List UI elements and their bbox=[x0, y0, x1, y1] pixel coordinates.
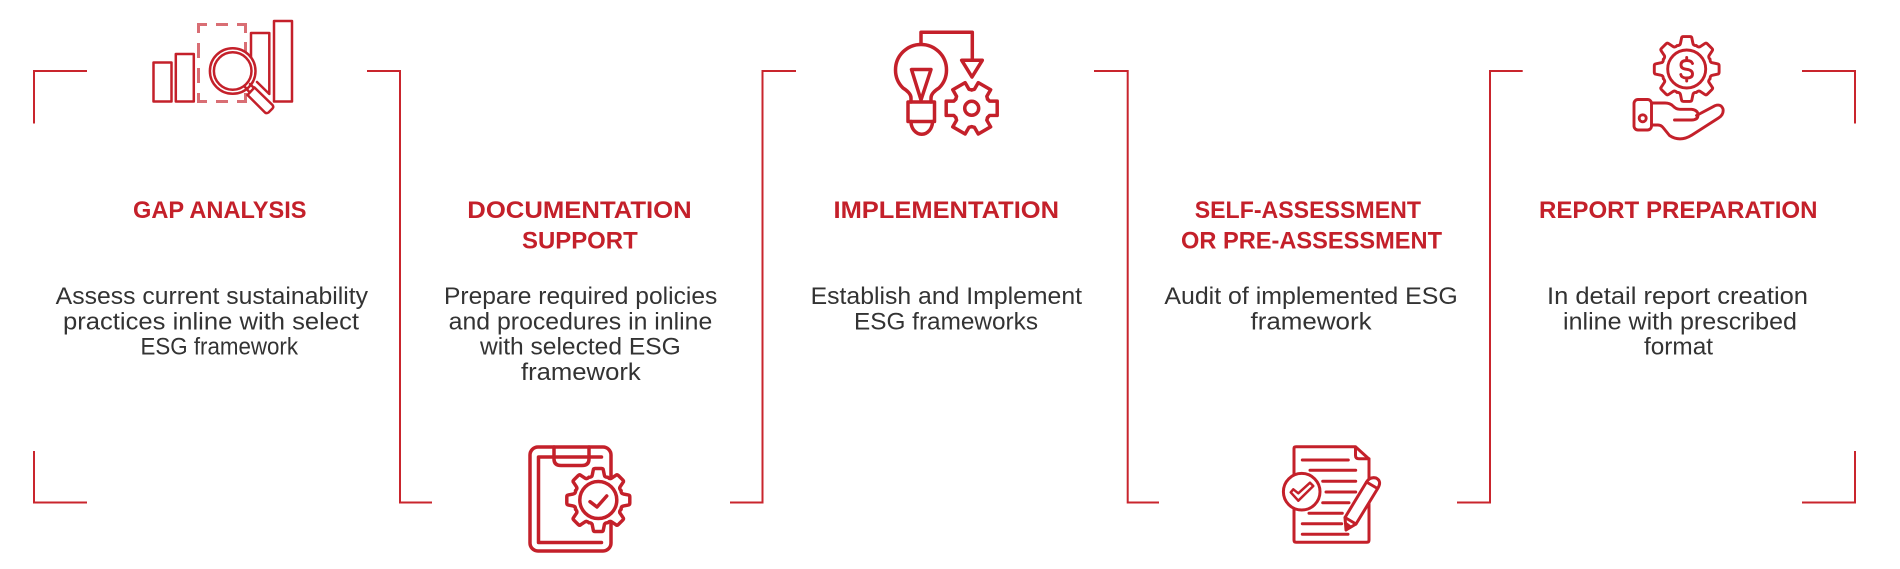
heading: implementation: IMPLEMENTATION bbox=[834, 197, 1059, 224]
bracket: panel 1 frame bbox=[34, 71, 432, 502]
heading: documentation support bbox=[467, 197, 692, 254]
panel: self-assessment or pre-assessment bbox=[1164, 71, 1523, 542]
text: report preparation description bbox=[1547, 283, 1808, 361]
icon: light bulb, arrow and gear bbox=[895, 32, 1008, 144]
text: implementation description: Establish and Implement bbox=[811, 283, 1082, 310]
panel: implementation bbox=[811, 32, 1159, 503]
icon: clipboard with gear and check bbox=[530, 447, 630, 551]
heading: documentation support: DOCUMENTATION bbox=[467, 197, 692, 224]
panel: documentation support bbox=[444, 71, 796, 551]
text: implementation description: ESG frameworks bbox=[854, 308, 1038, 335]
text: gap analysis description: practices inline with select bbox=[63, 308, 359, 335]
text: documentation support description: Prepare required policies bbox=[444, 283, 717, 310]
bracket: panel 2 frame bbox=[730, 71, 796, 502]
text: documentation support description bbox=[444, 283, 717, 386]
text: gap analysis description bbox=[56, 283, 369, 361]
heading: gap analysis: GAP ANALYSIS bbox=[133, 197, 306, 224]
icon: document with check and pencil bbox=[1283, 447, 1380, 542]
text: gap analysis description: Assess current sustainability bbox=[56, 283, 369, 310]
bracket: panel 5 frame bbox=[1802, 71, 1855, 502]
text: self-assessment description bbox=[1164, 283, 1458, 335]
panel: gap analysis bbox=[34, 21, 432, 502]
heading: self-assessment or pre-assessment: SELF-ASSESSMENT bbox=[1195, 197, 1421, 224]
heading: report preparation: REPORT PREPARATION bbox=[1539, 197, 1818, 224]
bracket: panel 3 frame bbox=[1094, 71, 1159, 502]
heading: self-assessment or pre-assessment bbox=[1181, 197, 1442, 254]
text: gap analysis description: ESG framework bbox=[140, 334, 299, 361]
text: documentation support description: with selected ESG bbox=[479, 334, 681, 361]
text: self-assessment description: Audit of implemented ESG bbox=[1164, 283, 1458, 310]
text: documentation support description: and procedures in inline bbox=[449, 308, 712, 335]
icon: bar chart with magnifier bbox=[154, 21, 292, 113]
bracket: panel 4 frame bbox=[1457, 71, 1523, 502]
heading: self-assessment or pre-assessment: OR PRE-ASSESSMENT bbox=[1181, 228, 1442, 254]
text: report preparation description: format bbox=[1644, 334, 1713, 361]
text: report preparation description: inline with prescribed bbox=[1563, 308, 1797, 335]
text: documentation support description: framework bbox=[521, 359, 641, 386]
icon: hand holding gear with dollar sign bbox=[1634, 37, 1723, 139]
panel: report preparation bbox=[1539, 37, 1855, 502]
heading: documentation support: SUPPORT bbox=[522, 228, 638, 254]
text: self-assessment description: framework bbox=[1250, 308, 1372, 335]
text: implementation description bbox=[811, 283, 1082, 335]
text: report preparation description: In detail report creation bbox=[1547, 283, 1808, 310]
